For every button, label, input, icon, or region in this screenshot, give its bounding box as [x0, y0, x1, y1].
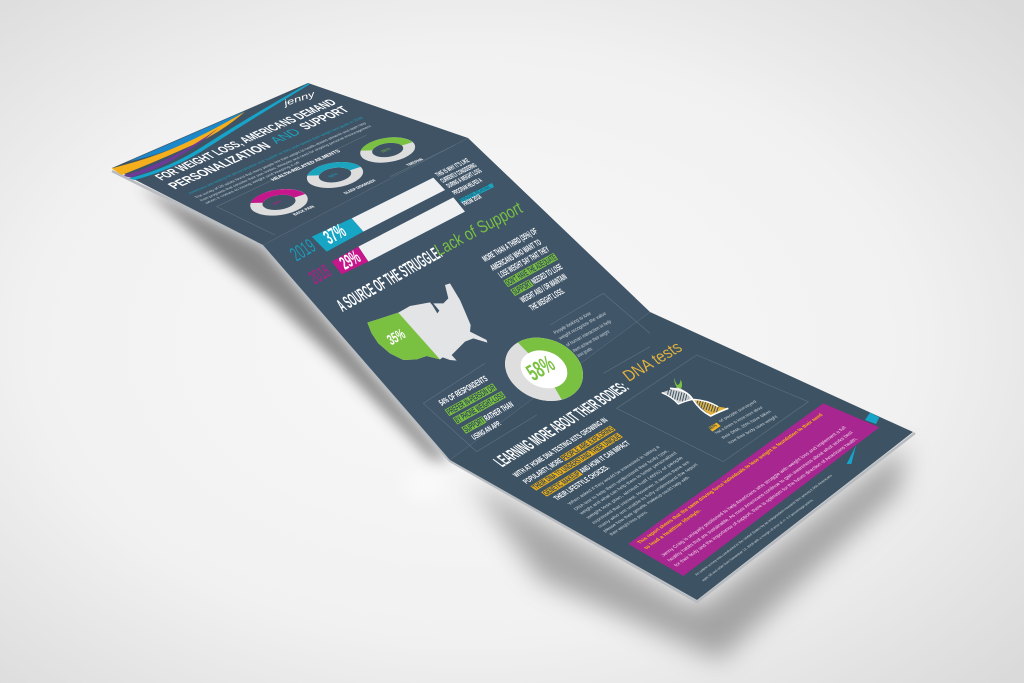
stat: 46% of people surveyed: how their body uses weight — [727, 414, 779, 445]
frame lines — [423, 293, 650, 452]
middle panel content — [332, 198, 650, 452]
callout heading: to lead a healthier lifestyle. — [643, 508, 704, 550]
line with highlight: POPULARITY, MORE — [520, 456, 565, 485]
text: body paragraph: DNA test to help them understand their body type, — [573, 449, 671, 512]
donut: 58%: 58% — [522, 351, 560, 386]
text: more than a third: THE WEIGHT LOSS. — [527, 286, 566, 313]
text: body paragraph: weight loss plan, almost half (46%) of people — [585, 456, 685, 520]
callout body: Jenny Craig is uniquely positioned to help Americans who struggle with weight loss and implement a full — [660, 426, 848, 558]
text: in person support: 54% OF RESPONDENTS — [437, 374, 490, 408]
side note beside bars: DURING A WEIGHT LOSS — [444, 167, 484, 189]
text: people looking to lose: loss goals. — [576, 346, 594, 359]
bottom panel content — [489, 339, 879, 582]
callout body: healthy habits that are sustainable. As more Americans continue to gain awareness about what works best — [666, 430, 855, 563]
top panel content — [151, 89, 465, 289]
bar: 2019: 2019 — [286, 235, 320, 266]
side note beside bars: CURRENTLY CONSIDERING — [438, 161, 479, 184]
map: united states — [367, 283, 487, 361]
stat: 46% of people surveyed: had a desire to know more about — [713, 405, 764, 435]
side note beside bars — [433, 156, 494, 207]
footnote: An online survey was conducted in the United States by an independent research firm among 2,000 Americans — [694, 474, 833, 576]
logo: jenny: jenny — [281, 89, 317, 108]
folded sheet: three panels — [112, 83, 913, 600]
text: people looking to lose: of human interaction to help — [565, 319, 613, 348]
text: body paragraph: please how their genetic makeup could help with — [602, 476, 692, 533]
bar: 2019: 37% — [319, 220, 350, 249]
text: in person support: USING AN APP. — [470, 419, 503, 442]
donut: time/pain: 36% — [379, 147, 392, 153]
donut: time/pain — [360, 135, 425, 167]
stat: 46% of people surveyed — [707, 399, 779, 445]
side note beside bars: PERSONAL INCREASE — [458, 185, 492, 203]
ailments label: HEALTH-RELATED AILMENTS — [270, 149, 343, 182]
map: united states: 35% — [384, 326, 409, 349]
side note beside bars: THIS IS WHY IT'S LIKE — [433, 156, 471, 178]
intro text: when it comes to losing weight and keeping it off — [203, 160, 302, 205]
text: body paragraph — [567, 445, 701, 537]
stat: 46% of people surveyed: their DNA, 20% have taken — [720, 409, 773, 440]
bar: 2019 — [286, 178, 445, 266]
panel: top — [112, 83, 468, 245]
infographic sheet — [112, 83, 913, 600]
text: body paragraph: When asked if they would be interested in taking a — [567, 445, 662, 506]
highlighted line: THEIR DNA TO UNDERSTAND THEIR UNIQUE — [530, 432, 623, 491]
text: more than a third: DON'T HAVE THE ADEQUATE — [503, 252, 558, 288]
panel: magenta callout — [628, 403, 879, 576]
script heading: DNA tests: DNA tests — [617, 339, 687, 384]
chart frame lines — [217, 135, 455, 235]
line with highlight — [540, 439, 632, 497]
paper edge — [112, 171, 915, 602]
donut: sleep disorder: 38% — [327, 172, 340, 179]
bar: 2018: 2018 — [305, 262, 335, 289]
text: people looking to lose: People looking to lose — [553, 311, 593, 336]
highlighted word and rest of line: SUPPORT — [461, 415, 487, 434]
highlighted word and rest of line: SUPPORT — [510, 279, 534, 297]
middle panel content: A SOURCE OF THE STRUGGLE: — [332, 242, 446, 315]
text: people looking to lose: them achieve their weight — [572, 329, 611, 354]
text: body paragraph: their weight-loss plans. — [608, 510, 650, 537]
title: PERSONALIZATION — [164, 140, 274, 191]
footnote: ages 18 and older from November 12, 2018 with a margin of error of +/- 2.2 percentage points. — [701, 498, 815, 582]
donut: 58% — [489, 326, 599, 413]
text: more than a third: NEEDED TO LOSE — [529, 262, 564, 286]
text: at home DNA testing — [510, 416, 632, 502]
donut: back pain: 39% — [271, 199, 284, 206]
callout body: for their body and the importance of support, there is optimism for the future direction of Americans health. — [673, 437, 860, 568]
intro text: Americans are looking for personalization and support as they work toward their weight loss goals in 2019 — [187, 116, 365, 195]
middle panel content: WEIGHT AND / OR MAINTAIN — [518, 272, 569, 305]
shadow: under upper folds — [140, 185, 450, 462]
title: AND — [266, 126, 304, 146]
line with highlight: AND HOW IT CAN IMPACT — [577, 439, 632, 474]
intro text: The survey of US adults found that many people link their weight to health-related ailments and seek help — [193, 121, 368, 199]
highlighted word and rest of line: RATHER THAN — [482, 400, 515, 423]
text: in person support — [437, 374, 515, 442]
line with highlight — [520, 425, 617, 485]
background glow — [403, 469, 447, 501]
donut: sleep disorder — [306, 159, 377, 195]
title: FOR WEIGHT LOSS, AMERICANS DEMAND — [151, 97, 340, 182]
panel: middle — [263, 138, 650, 460]
shadow: under lower panel — [470, 445, 905, 660]
callout heading — [636, 413, 825, 550]
donut: back pain — [250, 186, 316, 218]
highlighted word and rest of line — [461, 400, 515, 435]
text: people looking to lose — [553, 311, 613, 359]
text: at home DNA testing: WITH AT HOME DNA TESTING KITS GROWING IN — [510, 416, 610, 479]
stat: 46% of people surveyed: of people surveyed — [717, 399, 758, 423]
text: more than a third: MORE THAN A THIRD (35%) OF — [480, 226, 539, 264]
side note beside bars: PROGRAM HELPED A — [450, 176, 485, 196]
highlighted word and rest of line — [510, 262, 564, 297]
highlighted line 2: BY PHONE WEIGHT-LOSS — [453, 391, 506, 425]
donut: sleep disorder: SLEEP DISORDER — [342, 179, 377, 195]
side note beside bars: FROM 2018 — [460, 193, 484, 207]
line with highlight: PEOPLE ARE EXPLORING — [559, 425, 616, 462]
donut: back pain: BACK PAIN — [292, 205, 316, 216]
line with highlight: GENETIC MAKEUP — [540, 469, 583, 497]
text: body paragraph: weight and what can help them to better personalized — [578, 451, 679, 516]
highlighted line 1: PREFER IN-PERSON OR — [445, 383, 497, 417]
text: body paragraph: expressed that interest. However, it seems there are — [591, 460, 692, 525]
ribbon accents — [847, 413, 879, 464]
text: body paragraph: many who are unable to fully understand the report — [597, 462, 701, 529]
script heading: lack of support: Lack of Support — [430, 198, 527, 259]
title — [151, 97, 353, 191]
text: at home DNA testing: THEIR LIFESTYLE CHOICES. — [551, 463, 612, 502]
bar: 2018 — [305, 197, 465, 289]
text: more than a third — [480, 226, 569, 313]
text: people looking to lose: weight recognize the value — [558, 311, 608, 342]
text: more than a third: LOSE WEIGHT SAY THAT THEY — [496, 244, 551, 280]
bar: 2018: 29% — [336, 247, 365, 274]
ribbon stripes — [112, 83, 310, 180]
bottom panel content: LEARNING MORE ABOUT THEIR BODIES: — [489, 379, 633, 470]
callout heading: This report shows that the same driving force individuals to lose weight is foundation to their need — [636, 413, 825, 545]
donut: time/pain: TIME/PAIN — [405, 157, 425, 167]
text: more than a third: AMERICANS WHO WANT TO — [488, 237, 543, 273]
frame lines — [617, 355, 808, 462]
panel: bottom — [450, 312, 913, 600]
stat: 46% of people surveyed: 46% — [707, 423, 719, 431]
intro text: from programs that consider their own bodies, lifestyles and need for ongoing personal encouragement — [198, 124, 373, 202]
icon: DNA helix — [662, 377, 728, 416]
title: SUPPORT — [295, 104, 353, 132]
